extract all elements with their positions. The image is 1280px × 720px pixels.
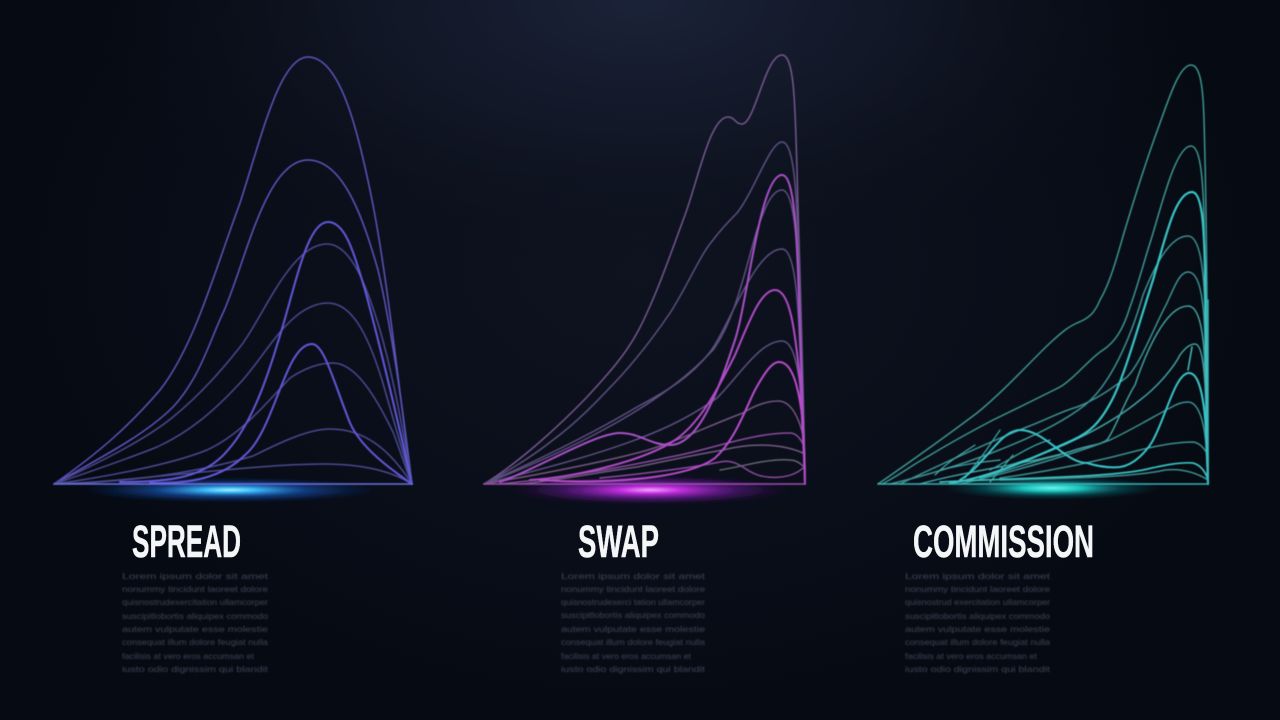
text block: spread: consequat illum dolore feugiat nulla xyxy=(122,637,268,647)
text block: commission: suscipitlobortis aliquipex commodo xyxy=(905,611,1050,621)
text block: swap: quisnostrudexerci tation ullamcorper xyxy=(561,597,705,607)
chart: spread curves xyxy=(54,57,412,503)
text block: commission: facilisis at vero eros accumsan et xyxy=(905,651,1038,661)
text block: spread: iusto odio dignissim qui blandit xyxy=(122,664,269,674)
text block: spread: Lorem ipsum dolor sit amet xyxy=(122,571,269,581)
panel: spread xyxy=(54,57,412,674)
panel: swap xyxy=(484,55,805,674)
heading: commission: COMMISSION xyxy=(913,516,1094,567)
text block: swap: consequat illum dolore feugiat nulla xyxy=(561,637,705,647)
text block: swap xyxy=(561,571,706,674)
heading: swap: SWAP xyxy=(578,516,659,567)
chart: commission curves xyxy=(878,65,1208,500)
text block: swap: nonummy tincidunt laoreet dolore xyxy=(561,584,705,594)
text block: commission: nonummy tincidunt laoreet dolore xyxy=(905,584,1050,594)
text block: spread: nonummy tincidunt laoreet dolore xyxy=(122,584,268,594)
text block: swap: Lorem ipsum dolor sit amet xyxy=(561,571,706,581)
text block: spread: quisnostrudexercitation ullamcorper xyxy=(122,597,268,607)
text block: commission: Lorem ipsum dolor sit amet xyxy=(905,571,1051,581)
text block: swap: facilisis at vero eros accumsan et xyxy=(561,651,692,661)
text block: spread: facilisis at vero eros accumsan et xyxy=(122,651,255,661)
text block: commission: autem vulputate esse molestie xyxy=(905,624,1050,634)
text block: commission: iusto odio dignissim qui blandit xyxy=(905,664,1051,674)
text block: spread: suscipitlobortis aliquipex commodo xyxy=(122,611,268,621)
text block: swap: suscipitlobortis aliquipex commodo xyxy=(561,610,705,620)
chart: swap curves xyxy=(484,55,805,505)
text block: commission xyxy=(905,571,1051,674)
text block: commission: quisnostrud exercitation ullamcorper xyxy=(905,597,1050,607)
heading: spread: SPREAD xyxy=(132,516,241,567)
text block: swap: autem vulputate esse molestie xyxy=(561,624,705,634)
text block: spread xyxy=(122,571,269,674)
text block: commission: consequat illum dolore feugiat nulla xyxy=(905,637,1050,647)
text block: spread: autem vulputate esse molestie xyxy=(122,624,268,634)
panel: commission xyxy=(878,65,1208,674)
text block: swap: iusto odio dignissim qui blandit xyxy=(561,664,706,674)
